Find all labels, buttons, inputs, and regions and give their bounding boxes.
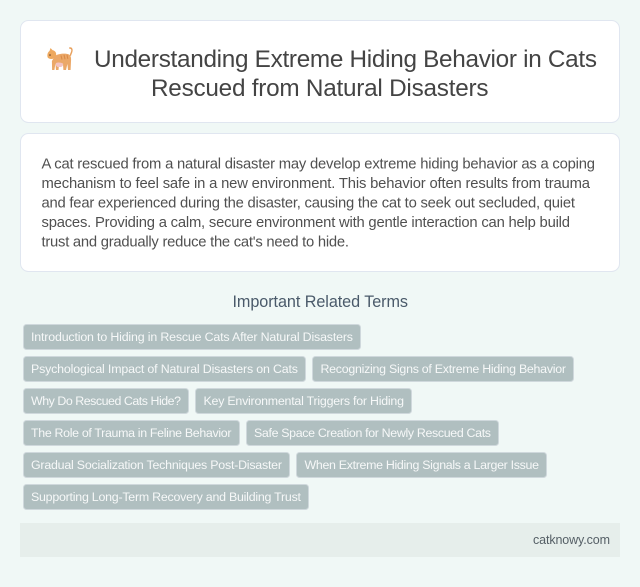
tag: Safe Space Creation for Newly Rescued Cats (254, 426, 491, 440)
text block: description: and fear experienced during the disaster, causing the cat to seek out secluded, quiet (42, 195, 575, 211)
tag (24, 484, 308, 510)
tag: Introduction to Hiding in Rescue Cats After Natural Disasters (31, 330, 353, 344)
tag: The Role of Trauma in Feline Behavior (31, 426, 232, 440)
tag: Key Environmental Triggers for Hiding (204, 394, 404, 408)
panel: description card (20, 134, 620, 272)
tag: Gradual Socialization Techniques Post-Disaster (31, 458, 282, 472)
text block: description: spaces. Providing a calm, secure environment with gentle interaction can help build (42, 215, 570, 231)
tag (24, 356, 306, 382)
heading: related terms: Important Related Terms (232, 293, 408, 311)
tag (196, 388, 412, 414)
icon: cat (47, 47, 73, 70)
tag: Supporting Long-Term Recovery and Building Trust (31, 490, 302, 504)
tag (24, 452, 290, 478)
tag: When Extreme Hiding Signals a Larger Issue (304, 458, 539, 472)
tag (24, 420, 240, 446)
footer: catknowy.com (533, 533, 610, 547)
text block: description: trust and gradually reduce the cat's need to hide. (42, 234, 349, 250)
tag: Psychological Impact of Natural Disasters on Cats (31, 362, 298, 376)
text block: description (42, 156, 595, 250)
tag: Why Do Rescued Cats Hide? (31, 394, 181, 408)
tag (24, 388, 188, 414)
tag (24, 324, 360, 350)
tag (246, 420, 498, 446)
tag (296, 452, 546, 478)
text block: description: A cat rescued from a natural disaster may develop extreme hiding behavior as a coping (42, 156, 595, 172)
title: Rescued from Natural Disasters (151, 75, 488, 102)
tag: Recognizing Signs of Extreme Hiding Behavior (320, 362, 566, 376)
title (94, 46, 597, 102)
panel: related term tags (24, 324, 574, 510)
text block: description: mechanism to feel safe in a new environment. This behavior often results from trauma (42, 176, 591, 192)
panel: title card (20, 20, 620, 122)
tag (312, 356, 574, 382)
footer (20, 523, 620, 557)
title: Understanding Extreme Hiding Behavior in Cats (94, 46, 597, 73)
